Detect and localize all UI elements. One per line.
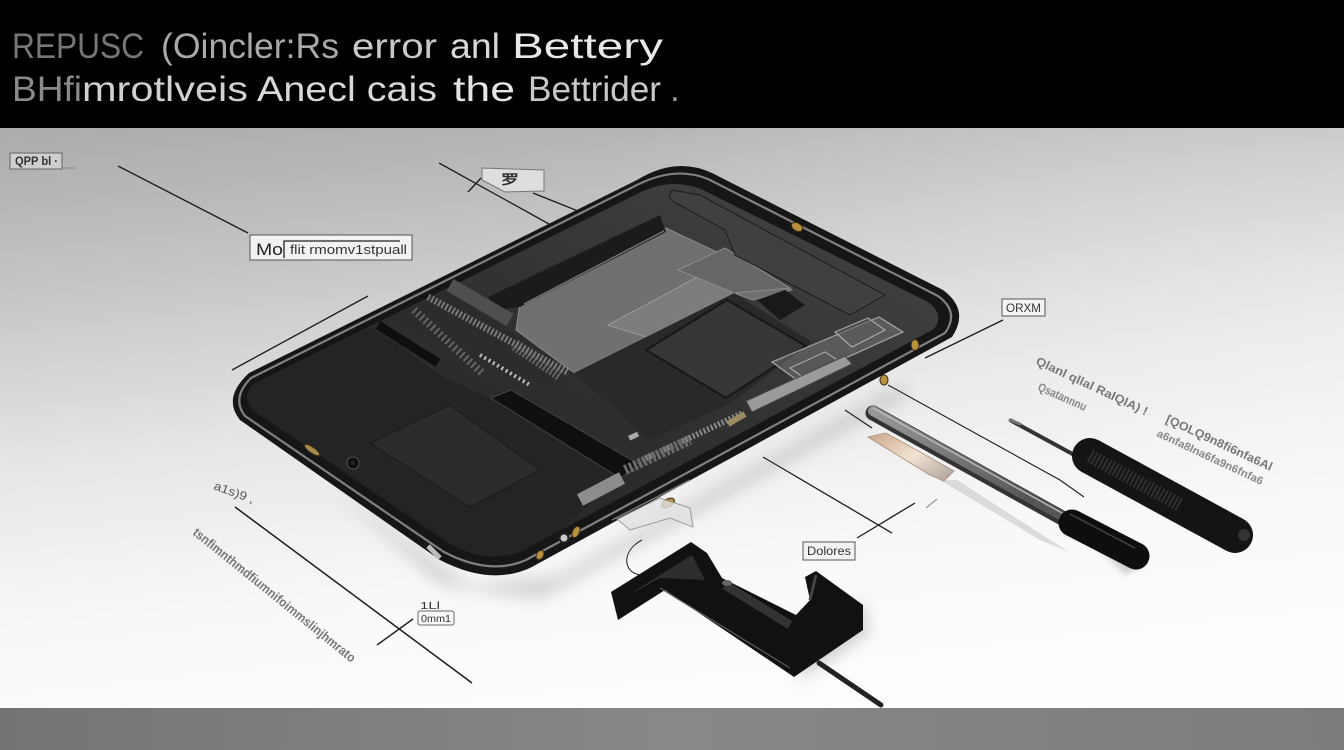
header bar with title: Bettrider (528, 70, 661, 109)
header bar with title: BHfi (12, 70, 82, 109)
label: lower tag (803, 542, 855, 560)
glass connector parts (772, 317, 903, 380)
small dark chip (757, 290, 805, 320)
label: flag tag (482, 168, 544, 192)
label: bottom-left small tag: 0mm1 (421, 614, 451, 625)
skewed caption: right: Qsatannnu (1036, 380, 1089, 414)
header bar with title: (Oincler:Rs (161, 27, 339, 66)
faint battery rectangle (370, 405, 540, 507)
header bar with title: . (670, 70, 680, 109)
translucent grey board (516, 228, 792, 373)
label: module tag: Mo (256, 240, 283, 259)
header bar with title: anl (450, 27, 500, 66)
upper circuit cluster (378, 285, 574, 388)
header bar with title: error (352, 27, 437, 66)
gold screws (303, 221, 919, 561)
label: top-left tag (10, 153, 75, 169)
central dark module (574, 293, 812, 440)
header bar with title (0, 0, 1344, 128)
skewed caption: right (1034, 354, 1275, 488)
phone drop shadow (330, 385, 910, 600)
bottom grey band (0, 708, 1344, 750)
label: right tag (1002, 299, 1045, 316)
phone (233, 166, 959, 575)
lower black band (491, 390, 640, 478)
label: flag tag: 罗 (501, 172, 519, 187)
header bar with title: Anecl cais (257, 70, 437, 109)
leader lines (118, 163, 1084, 683)
tool: pen with black grip (873, 408, 1145, 575)
camera hole (347, 457, 359, 469)
background panel (0, 128, 1344, 708)
dark square battery (646, 300, 806, 398)
skewed caption: bottom-left: tsnfimnthmdfiumnifoimmslinjhmrato (190, 525, 359, 665)
skewed caption: right: [QOLQ9n8fi6nfa6Al (1164, 412, 1275, 474)
label: top-left tag: QPP bl · (15, 154, 58, 168)
label: module tag (250, 235, 412, 260)
tool: gold blade (868, 433, 1069, 552)
skewed caption: right: a6nfa8lna6fa9n6fnfa6 (1155, 428, 1265, 488)
tool: black bracket (611, 542, 881, 705)
lower-left dark panel (247, 327, 620, 556)
black bar (488, 215, 666, 310)
label: right tag: ORXM (1006, 301, 1041, 315)
label: lower tag: Dolores (807, 544, 851, 558)
header bar with title: REPUSC (12, 27, 144, 66)
handwritten note: bottom-left top: a1s)9 , (212, 479, 256, 506)
top-right panel (670, 190, 885, 315)
label: module tag: flit rmomv1stpuall (290, 242, 407, 257)
phone frame (233, 166, 959, 575)
label: bottom-left small tag: 1Ll (420, 601, 440, 612)
tool: screwdriver (1010, 420, 1250, 541)
header bar with title: the (453, 70, 515, 109)
skewed caption: right: Qlanl qllal RalQlA) ! (1034, 354, 1150, 418)
phone clip (617, 498, 693, 530)
lower circuit strip (580, 413, 745, 500)
phone screen (247, 184, 938, 557)
label: bottom-left small tag (418, 601, 454, 625)
lower port cluster (560, 534, 568, 542)
header bar with title: Bettery (512, 27, 664, 66)
header bar with title: mrotlveis (82, 70, 248, 109)
silver bar (746, 356, 852, 412)
